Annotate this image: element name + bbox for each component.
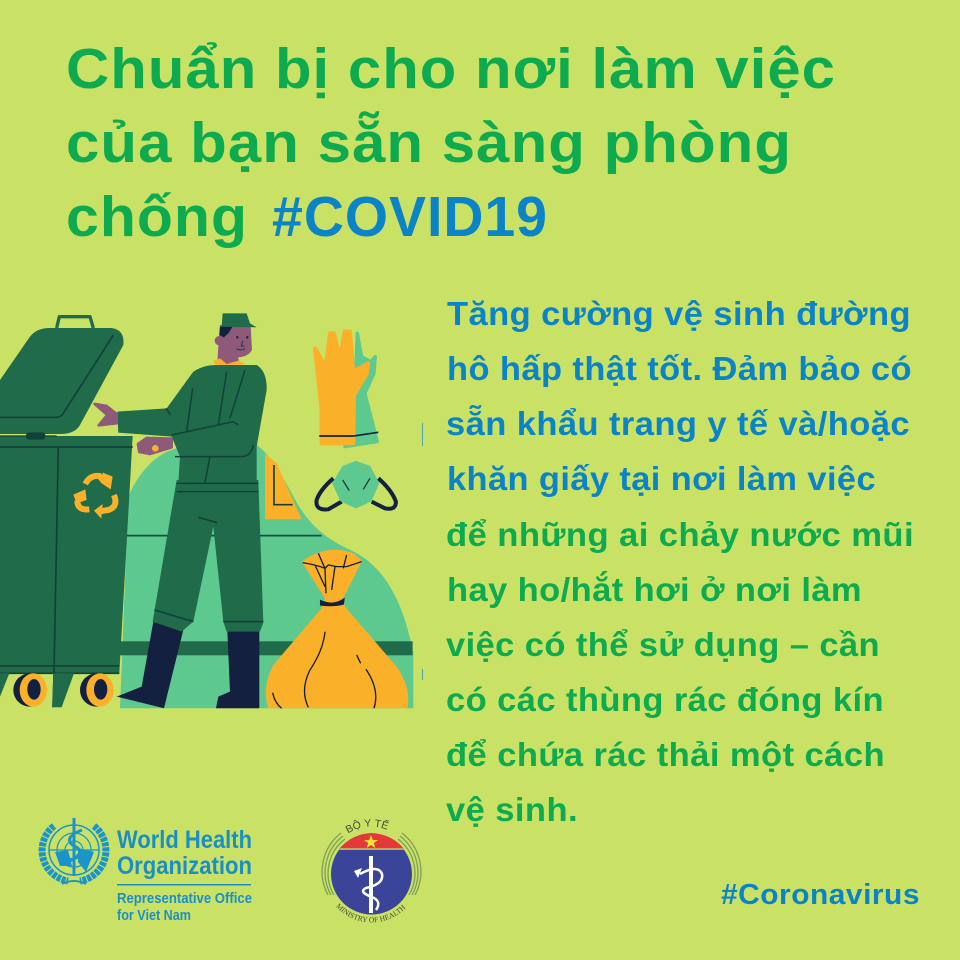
body text: Tăng cường vệ sinh đường (447, 296, 911, 333)
organisation name: for Viet Nam (117, 907, 191, 924)
body text: khăn giấy tại nơi làm việc (447, 461, 876, 498)
body text: hay ho/hắt hơi ở nơi làm (447, 571, 862, 609)
illustration: worker with bin, gloves, mask and bag (0, 313, 413, 708)
title: chống (66, 185, 248, 249)
body text: việc có thể sử dụng – cần (446, 627, 880, 664)
boots (117, 622, 183, 708)
hands (95, 404, 117, 425)
title: #COVID19 (272, 185, 548, 249)
logo: Ministry of Health: MINISTRY OF HEALTH (336, 903, 406, 922)
body text (446, 296, 914, 829)
logo: World Health Organization (42, 818, 252, 924)
icon: gloves (315, 332, 378, 447)
body text: vệ sinh. (446, 792, 578, 829)
worker (95, 313, 267, 708)
emblem captions (344, 826, 398, 836)
title: của bạn sẵn sàng phòng (66, 110, 792, 175)
body text: có các thùng rác đóng kín (446, 682, 884, 719)
trousers (153, 480, 263, 632)
body text: để những ai chảy nước mũi (446, 517, 914, 554)
bin (0, 317, 133, 707)
emblem (42, 818, 106, 884)
jacket (117, 365, 267, 483)
icon: rubbish bag (266, 550, 408, 708)
body text: hô hấp thật tốt. Đảm bảo có (447, 351, 912, 388)
logo: Ministry of Health (321, 819, 422, 922)
icon: recycle (73, 473, 115, 519)
hashtag: #Coronavirus (721, 879, 920, 911)
body text: sẵn khẩu trang y tế và/hoặc (446, 404, 910, 443)
organisation name: World Health (117, 826, 252, 854)
body text: để chứa rác thải một cách (446, 737, 885, 774)
background hill (120, 443, 413, 708)
organisation name: Organization (117, 852, 252, 880)
title (66, 37, 836, 249)
logo: Ministry of Health: BỘ Y TẾ (345, 819, 390, 833)
organisation name (117, 826, 252, 924)
title: Chuẩn bị cho nơi làm việc (66, 37, 836, 101)
wheels (13, 673, 114, 707)
icon: face mask (316, 462, 396, 509)
organisation name: Representative Office (117, 890, 252, 907)
neck and head (217, 325, 252, 365)
